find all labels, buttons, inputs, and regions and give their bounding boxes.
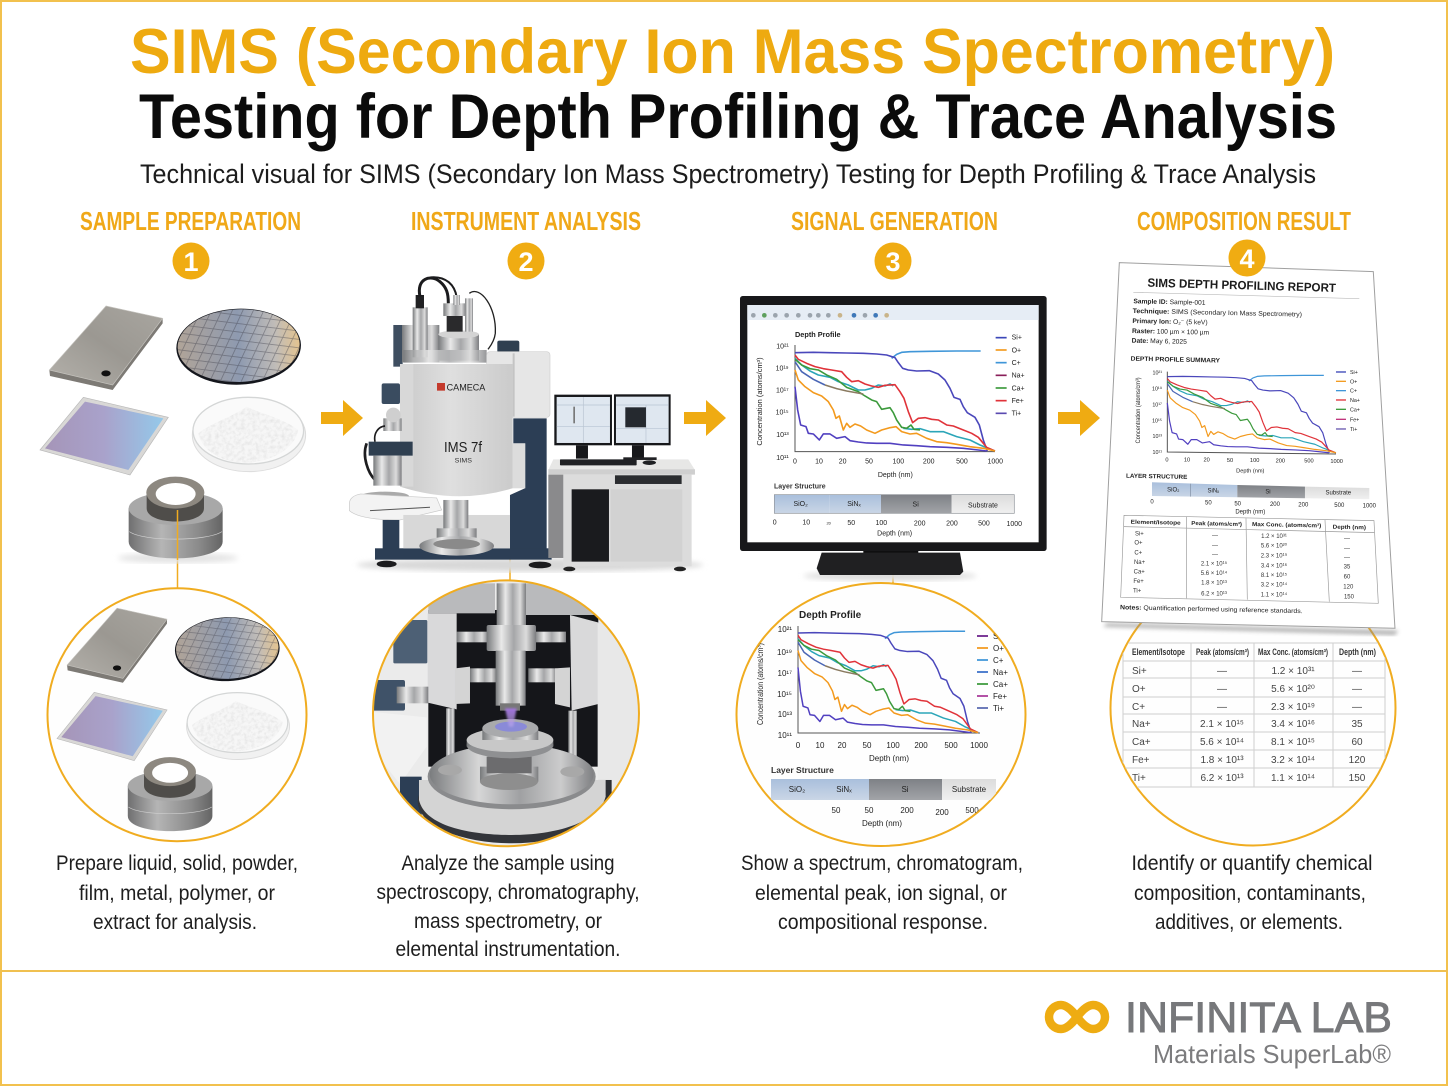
badge: step 3 xyxy=(874,242,912,280)
circle detail: depth profile chart: 0 xyxy=(796,741,801,750)
report results table: — xyxy=(1212,543,1218,549)
layer structure bar xyxy=(773,484,1022,538)
caption: composition result xyxy=(1132,852,1372,934)
report results table: Depth (nm) xyxy=(1333,525,1366,531)
report metadata: Date: May 6, 2025 xyxy=(1132,338,1187,346)
dual monitors xyxy=(554,394,671,465)
icon: infinity xyxy=(1049,1005,1105,1029)
step headings: COMPOSITION RESULT xyxy=(1137,206,1351,236)
footer divider xyxy=(0,970,1448,972)
report chart: 10¹¹ xyxy=(1153,450,1162,456)
report chart: Fe+ xyxy=(1350,417,1359,423)
report chart: Ca+ xyxy=(1350,407,1360,413)
report chart: Ti+ xyxy=(1350,427,1357,433)
caption: signal generation xyxy=(741,852,1023,934)
report chart: DEPTH PROFILE SUMMARY xyxy=(1131,356,1221,365)
logo: Infinita Lab: Materials SuperLab® xyxy=(1153,1039,1391,1069)
report metadata: Technique: SIMS (Secondary Ion Mass Spectrometry) xyxy=(1133,308,1302,319)
report metadata: Sample ID: Sample-001 xyxy=(1133,298,1206,307)
circle detail: ion beam on sample stage xyxy=(365,580,648,850)
circle detail: results table xyxy=(1110,623,1396,846)
report layer structure: Si xyxy=(1265,489,1271,495)
report results table: 3.4 × 10¹⁶ xyxy=(1261,562,1288,569)
report chart: O+ xyxy=(1350,379,1357,385)
caption: instrument analysis xyxy=(376,852,640,961)
caption: composition result: Identify or quantify chemical xyxy=(1132,852,1372,875)
report results table: 60 xyxy=(1344,575,1351,581)
circle detail: depth profile chart: Ca+ xyxy=(993,680,1008,689)
circle detail: results table: 35 xyxy=(1351,719,1363,730)
legend: Si+ xyxy=(1012,335,1022,342)
report layer structure: Depth (nm) xyxy=(1235,509,1265,515)
circle detail: results table: Ca+ xyxy=(1132,737,1151,748)
step headings: INSTRUMENT ANALYSIS xyxy=(411,206,641,236)
circle detail: depth profile chart: 50 xyxy=(863,741,872,750)
report results table: 150 xyxy=(1344,595,1355,601)
caption: sample preparation xyxy=(56,852,298,934)
circle detail: depth profile chart: SiNₓ xyxy=(836,785,852,794)
panel: sample preparation samples xyxy=(40,306,306,563)
circle detail: results table: 60 xyxy=(1351,737,1363,748)
caption: sample preparation: extract for analysis. xyxy=(93,911,257,934)
logo: Infinita Lab xyxy=(1049,994,1392,1069)
circle detail: depth profile chart: SiO₂ xyxy=(789,785,805,794)
layer structure bar: 10 xyxy=(802,520,810,527)
report layer structure: 50 xyxy=(1205,501,1212,507)
panel: SIMS instrument xyxy=(349,277,703,572)
circle detail: results table: O+ xyxy=(1132,684,1146,695)
circle detail: results table: 5.6 × 10¹⁴ xyxy=(1200,737,1244,748)
circle detail: depth profile chart: O+ xyxy=(993,644,1004,653)
layer structure bar: 200 xyxy=(946,520,958,527)
badge: step 2 xyxy=(508,242,544,280)
caption: composition result: composition, contaminants, xyxy=(1134,882,1366,905)
report layer structure: 0 xyxy=(1150,500,1154,506)
caption: instrument analysis: Analyze the sample using xyxy=(402,852,614,875)
report layer structure: SiO₂ xyxy=(1167,488,1180,494)
report layer structure: 500 xyxy=(1334,503,1345,509)
report notes: Notes: Quantification performed using reference standards. xyxy=(1120,604,1303,615)
circle detail: depth profile chart: C+ xyxy=(993,656,1004,665)
report results table: 6.2 × 10¹³ xyxy=(1201,591,1227,597)
circle detail: results table: Peak (atoms/cm³) xyxy=(1196,647,1249,657)
report chart: 100 xyxy=(1250,458,1259,464)
connector lines xyxy=(178,510,893,589)
report results table: Na+ xyxy=(1134,560,1146,566)
subtitle: Technical visual for SIMS (Secondary Ion Mass Spectrometry) Testing for Depth Profiling & Trace Analysis xyxy=(140,159,1316,189)
circle detail: depth profile chart: Concentration (atoms/cm³) xyxy=(755,643,765,725)
circle detail: depth profile chart: 200 xyxy=(935,808,949,817)
panel: SIMS depth profiling report xyxy=(1102,263,1398,635)
circle detail: depth profile chart: 50 xyxy=(832,806,841,815)
report results table: — xyxy=(1344,546,1350,552)
legend: Ti+ xyxy=(1012,411,1021,418)
caption: instrument analysis: elemental instrumentation. xyxy=(396,938,620,961)
report results table: C+ xyxy=(1134,550,1143,556)
report results table: — xyxy=(1212,552,1218,558)
chart: depth profile: 1000 xyxy=(988,459,1003,466)
circle detail: depth profile chart: Substrate xyxy=(952,785,987,794)
circle detail: depth profile chart: 20 xyxy=(838,741,847,750)
step headings: SAMPLE PREPARATION xyxy=(80,206,301,236)
chart: depth profile: 10 xyxy=(815,459,823,466)
report results table: 3.2 × 10¹⁴ xyxy=(1261,582,1288,589)
legend: C+ xyxy=(1012,360,1021,367)
chart: depth profile: 50 xyxy=(865,459,873,466)
circle detail: depth profile chart: 1000 xyxy=(970,741,988,750)
circle detail: depth profile chart: 10¹⁷ xyxy=(778,669,792,678)
circle detail: samples xyxy=(48,588,306,841)
arrow: step 1 to 2 xyxy=(321,400,363,436)
caption: composition result: additives, or elements. xyxy=(1155,911,1343,934)
report results table: 5.6 × 10²⁰ xyxy=(1261,543,1288,550)
circle detail: depth profile chart: Ti+ xyxy=(993,704,1004,713)
title: Testing for Depth Profiling & Trace Analysis xyxy=(139,82,1337,152)
chart: depth profile: 500 xyxy=(956,459,968,466)
report layer structure xyxy=(1126,474,1377,515)
report results table: 1.2 × 10³¹ xyxy=(1261,534,1287,540)
chart: depth profile: Depth Profile xyxy=(795,330,841,339)
circle detail: results table: 3.2 × 10¹⁴ xyxy=(1271,755,1315,766)
report results table: Ti+ xyxy=(1133,589,1142,595)
report results table: 8.1 × 10¹⁵ xyxy=(1261,572,1288,579)
circle detail: results table: 120 xyxy=(1349,755,1366,766)
circle detail: results table: Ti+ xyxy=(1132,773,1146,784)
layer structure bar: Depth (nm) xyxy=(877,531,912,538)
report chart: 10¹⁷ xyxy=(1152,402,1162,408)
circle detail: depth profile chart: 10¹⁹ xyxy=(777,648,792,657)
report chart: Na+ xyxy=(1350,398,1360,404)
report chart: 1000 xyxy=(1330,459,1343,465)
legend: Fe+ xyxy=(1012,398,1024,405)
badge: step 1: 1 xyxy=(183,247,199,277)
chart: depth profile: 10¹⁹ xyxy=(776,365,789,372)
layer structure bar: Layer Structure xyxy=(774,484,826,491)
circle detail: depth profile chart: Layer Structure xyxy=(771,765,834,775)
layer structure bar: SiNₓ xyxy=(847,501,861,508)
circle detail: results table: C+ xyxy=(1132,702,1145,713)
report chart: Si+ xyxy=(1350,370,1358,376)
report results table: 1.8 × 10¹³ xyxy=(1201,581,1227,587)
report layer structure: 50 xyxy=(1234,501,1242,507)
chart: depth profile: 10¹⁵ xyxy=(776,410,789,417)
chart: depth profile: 10²¹ xyxy=(776,344,789,351)
circle detail: results table: Si+ xyxy=(1132,666,1147,677)
layer structure bar: 500 xyxy=(978,521,990,528)
chart: depth profile: Depth (nm) xyxy=(878,472,913,479)
report layer structure: SiNₓ xyxy=(1208,488,1219,494)
circle detail: depth profile chart: 50 xyxy=(865,806,874,815)
circle detail: results table: 2.3 × 10¹⁹ xyxy=(1271,702,1315,713)
chart: depth profile: 10¹³ xyxy=(776,432,789,439)
report chart: 10¹⁵ xyxy=(1152,418,1162,424)
circle detail: depth profile chart: Na+ xyxy=(993,668,1008,677)
circle detail: depth profile chart: 10¹⁵ xyxy=(777,690,792,699)
layer structure bar: 50 xyxy=(847,520,855,527)
chart: depth profile: 10¹¹ xyxy=(776,455,789,462)
caption: signal generation: compositional response. xyxy=(778,911,988,934)
text: instrument labels xyxy=(437,382,485,464)
step headings xyxy=(80,206,1351,236)
logo: Infinita Lab: INFINITA LAB xyxy=(1125,994,1392,1042)
report results table: 5.6 × 10¹⁴ xyxy=(1201,570,1228,577)
report layer structure: 1000 xyxy=(1363,504,1377,510)
report results table: Peak (atoms/cm³) xyxy=(1191,520,1242,528)
report results table: O+ xyxy=(1134,541,1143,547)
caption: sample preparation: Prepare liquid, solid, powder, xyxy=(56,852,298,875)
report chart: 0 xyxy=(1165,457,1169,463)
layer structure bar: 0 xyxy=(773,520,777,527)
report results table: — xyxy=(1344,555,1350,561)
badge: step 4 xyxy=(1228,240,1266,276)
report chart: 10²¹ xyxy=(1153,371,1162,377)
report results table: Ca+ xyxy=(1134,570,1145,576)
circle detail: results table: 150 xyxy=(1349,773,1366,784)
circle detail: results table: 1.1 × 10¹⁴ xyxy=(1271,773,1315,784)
circle detail: depth profile chart xyxy=(736,583,1026,846)
badge: step 4: 4 xyxy=(1239,244,1255,274)
chart: depth profile: 200 xyxy=(923,459,935,466)
report chart xyxy=(1131,356,1360,475)
circle detail: results table: — xyxy=(1352,666,1362,677)
circle detail: results table: 8.1 × 10¹⁵ xyxy=(1271,737,1315,748)
report layer structure: LAYER STRUCTURE xyxy=(1126,474,1187,481)
caption: signal generation: Show a spectrum, chromatogram, xyxy=(741,852,1023,875)
report layer structure: 200 xyxy=(1298,502,1309,508)
layer structure bar: SiO₂ xyxy=(793,501,808,508)
chart: depth profile: Concentration (atoms/cm³) xyxy=(755,357,764,446)
chart: depth profile: 100 xyxy=(892,459,904,466)
report chart: 10¹³ xyxy=(1153,434,1162,440)
layer structure bar: Substrate xyxy=(968,502,998,509)
circle detail: results table: 6.2 × 10¹³ xyxy=(1200,773,1244,784)
circle detail: depth profile chart: Fe+ xyxy=(993,692,1007,701)
layer structure bar: 100 xyxy=(875,520,887,527)
legend xyxy=(996,335,1025,418)
chart: depth profile: 20 xyxy=(839,459,847,466)
report results table xyxy=(1121,515,1378,603)
circle detail: results table: — xyxy=(1352,684,1362,695)
report results table: — xyxy=(1212,534,1218,540)
report metadata xyxy=(1132,298,1302,346)
circle detail: depth profile chart: Depth (nm) xyxy=(862,819,902,828)
legend: Ca+ xyxy=(1012,385,1025,392)
badge: step 3: 3 xyxy=(885,247,901,277)
circle detail: results table: Depth (nm) xyxy=(1339,647,1376,657)
circle detail: results table: 5.6 × 10²⁰ xyxy=(1271,684,1315,695)
text: instrument labels: SIMS xyxy=(455,457,472,464)
circle detail: results table: — xyxy=(1217,684,1227,695)
circle detail: depth profile chart: 10¹¹ xyxy=(778,731,792,740)
caption: instrument analysis: spectroscopy, chromatography, xyxy=(376,881,640,904)
caption: sample preparation: film, metal, polymer, or xyxy=(79,882,275,905)
circle detail: depth profile chart: 10¹³ xyxy=(778,710,792,719)
circle detail: depth profile chart: Si+ xyxy=(993,632,1005,641)
monitor stand xyxy=(817,550,963,575)
chart: depth profile: 10¹⁷ xyxy=(776,387,789,394)
circle detail: results table: Max Conc. (atoms/cm³) xyxy=(1258,647,1328,657)
report results table: 120 xyxy=(1343,585,1354,591)
badge: step 1 xyxy=(172,242,210,280)
report results table: 1.1 × 10¹⁴ xyxy=(1261,591,1288,598)
report chart: 10 xyxy=(1184,457,1190,463)
circle detail: results table: Na+ xyxy=(1132,719,1151,730)
circle detail: depth profile chart: 500 xyxy=(944,741,958,750)
circle detail: depth profile chart: 10²¹ xyxy=(778,625,792,634)
report chart: 20 xyxy=(1204,458,1210,464)
title xyxy=(130,17,1337,152)
title: SIMS (Secondary Ion Mass Spectrometry) xyxy=(130,17,1335,87)
circle detail: results table: 1.2 × 10³¹ xyxy=(1271,666,1315,677)
legend: Na+ xyxy=(1012,373,1025,380)
circle detail: results table: Fe+ xyxy=(1132,755,1150,766)
report metadata: Raster: 100 µm × 100 µm xyxy=(1132,328,1210,337)
report chart: Concentration (atoms/cm³) xyxy=(1136,377,1142,443)
report results table: Fe+ xyxy=(1133,579,1144,585)
circle detail: results table: — xyxy=(1352,702,1362,713)
circle detail: depth profile chart: Depth (nm) xyxy=(869,754,909,763)
report chart: 200 xyxy=(1276,458,1285,464)
circle detail: depth profile chart: 100 xyxy=(886,741,900,750)
circle detail: results table: Element/Isotope xyxy=(1132,647,1185,657)
arrow: step 3 to 4 xyxy=(1058,400,1100,436)
report chart: 10¹⁹ xyxy=(1152,386,1162,392)
circle detail: results table: 2.1 × 10¹⁵ xyxy=(1200,719,1244,730)
circle detail: depth profile chart: Depth Profile xyxy=(799,610,862,621)
caption: signal generation: elemental peak, ion signal, or xyxy=(755,882,1007,905)
report results table: Element/Isotope xyxy=(1131,520,1181,527)
report chart: Depth (nm) xyxy=(1236,469,1265,475)
report chart: 500 xyxy=(1304,459,1314,465)
report metadata: Primary Ion: O₂⁻ (5 keV) xyxy=(1132,318,1208,327)
layer structure bar: 1000 xyxy=(1007,521,1022,528)
circle detail: results table: 1.8 × 10¹³ xyxy=(1200,755,1244,766)
layer structure bar: Si xyxy=(913,502,919,509)
layer structure bar: 20 xyxy=(826,521,832,526)
circle detail: depth profile chart: 200 xyxy=(900,806,914,815)
panel: monitor with depth profile xyxy=(740,296,1047,581)
report chart: 50 xyxy=(1227,458,1233,464)
report results table: 35 xyxy=(1344,565,1351,571)
report layer structure: Substrate xyxy=(1325,491,1352,497)
arrow: step 2 to 3 xyxy=(684,400,726,436)
chart: depth profile xyxy=(755,330,1025,479)
report layer structure: 200 xyxy=(1270,502,1281,508)
text: instrument labels: CAMECA xyxy=(447,382,485,392)
circle detail: depth profile chart: 10 xyxy=(816,741,825,750)
badge: step 2: 2 xyxy=(518,247,534,277)
layer structure bar: 200 xyxy=(914,520,926,527)
step headings: SIGNAL GENERATION xyxy=(791,206,998,236)
circle detail: depth profile chart: 200 xyxy=(914,741,928,750)
circle detail: depth profile chart: 500 xyxy=(965,806,979,815)
console table xyxy=(548,459,695,571)
report results table: 2.1 × 10¹⁵ xyxy=(1201,561,1228,568)
report results table: — xyxy=(1344,536,1350,542)
report results table: Si+ xyxy=(1135,531,1144,537)
circle detail: depth profile chart: Si xyxy=(901,785,909,794)
text: instrument labels: IMS 7f xyxy=(444,440,482,456)
legend: O+ xyxy=(1012,347,1021,354)
chart: depth profile: 0 xyxy=(793,459,797,466)
circle detail: results table: 3.4 × 10¹⁶ xyxy=(1271,719,1315,730)
report chart: C+ xyxy=(1350,389,1357,395)
report heading: SIMS DEPTH PROFILING REPORT xyxy=(1147,276,1337,295)
report results table: 2.3 × 10¹⁹ xyxy=(1261,552,1288,559)
circle detail: results table: — xyxy=(1217,666,1227,677)
report results table: Max Conc. (atoms/cm³) xyxy=(1252,521,1322,529)
circle detail: results table: — xyxy=(1217,702,1227,713)
caption: instrument analysis: mass spectrometry, or xyxy=(414,910,602,933)
